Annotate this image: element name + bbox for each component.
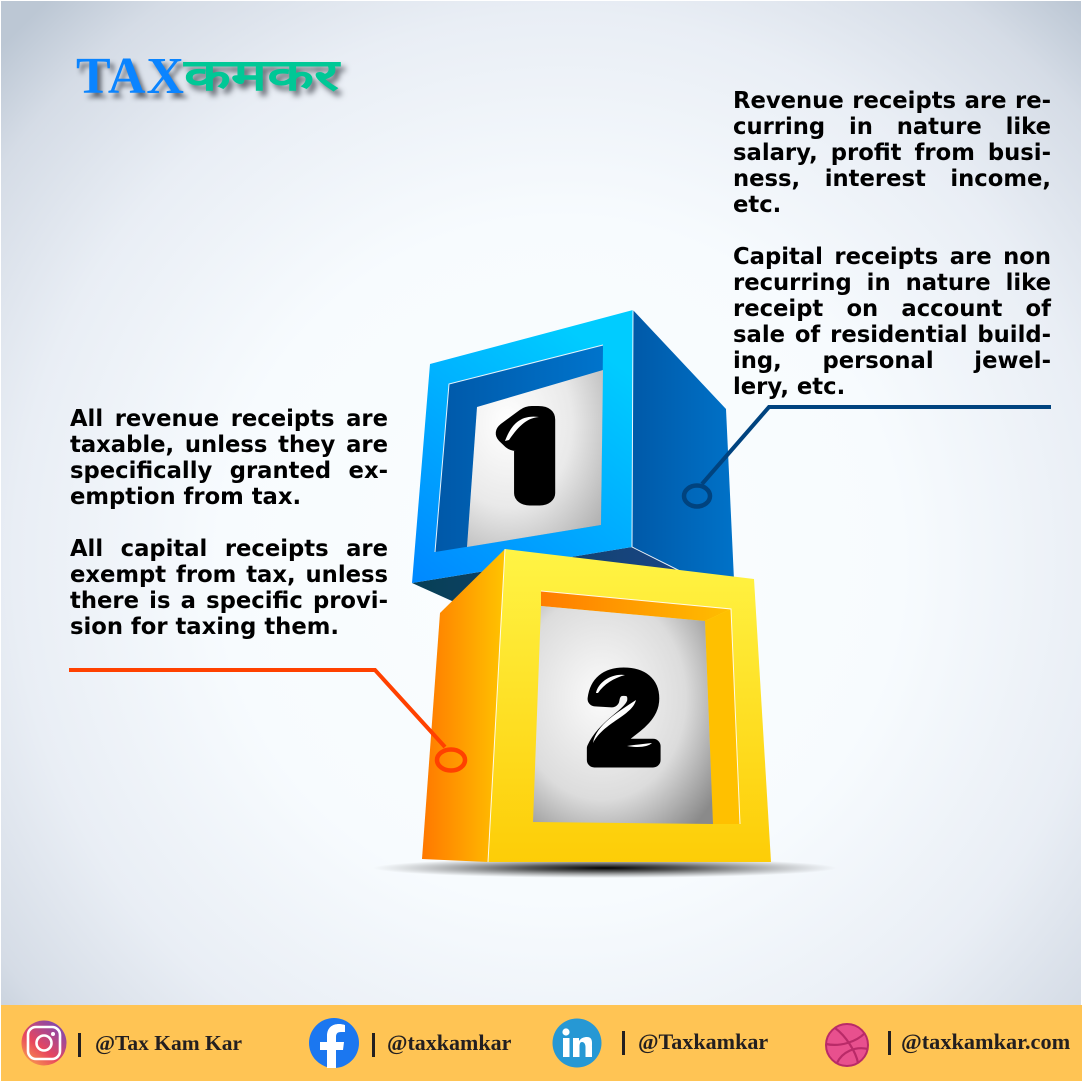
text block: taxability of receipts: All revenue receipts are — [70, 406, 388, 432]
text block: taxability of receipts: emption from tax. — [70, 484, 301, 510]
text block: revenue and capital receipts: ing, personal jewel- — [733, 348, 1051, 374]
number 1: 1 — [493, 409, 570, 510]
text block: revenue and capital receipts — [733, 88, 1052, 400]
cube 2 (yellow) — [422, 549, 771, 862]
text block: revenue and capital receipts: salary, profit from busi- — [733, 140, 1051, 166]
footer handle: facebook: @taxkamkar — [387, 1030, 511, 1055]
callout line: orange — [69, 670, 465, 770]
text block: revenue and capital receipts: curring in nature like — [733, 114, 1051, 140]
logo: TAX kamkar: कमकर — [184, 39, 339, 103]
text block: taxability of receipts: sion for taxing them. — [70, 614, 339, 640]
cube 1 (blue) — [412, 310, 734, 601]
logo: TAX kamkar: TAX — [76, 48, 185, 105]
text block: revenue and capital receipts: Capital receipts are non — [733, 244, 1051, 270]
footer handle: website: @taxkamkar.com — [901, 1029, 1070, 1054]
text block: revenue and capital receipts: Revenue receipts are re- — [733, 88, 1051, 114]
callout line: blue — [684, 407, 1051, 506]
text block: revenue and capital receipts: recurring in nature like — [733, 270, 1051, 296]
ground shadow — [373, 858, 837, 878]
footer icons — [22, 1018, 869, 1068]
footer bar — [1, 1005, 1082, 1081]
text block: taxability of receipts: All capital receipts are — [70, 536, 388, 562]
text block: revenue and capital receipts: receipt on account of — [733, 296, 1051, 322]
text block: revenue and capital receipts: sale of residential build- — [733, 322, 1051, 348]
footer handle: linkedin: @Taxkamkar — [638, 1029, 768, 1054]
icon: dribbble — [826, 1024, 868, 1066]
footer handle: instagram: @Tax Kam Kar — [95, 1031, 242, 1055]
icon: linkedin — [552, 1018, 602, 1068]
icon: facebook — [309, 1018, 359, 1068]
text block: taxability of receipts — [70, 406, 388, 640]
number 2: 2 — [590, 650, 658, 786]
text block: taxability of receipts: there is a specific provi- — [70, 588, 388, 614]
text block: revenue and capital receipts: ness, interest income, — [733, 166, 1051, 192]
text block: revenue and capital receipts: etc. — [733, 192, 781, 218]
icon: instagram — [22, 1020, 66, 1066]
text block: taxability of receipts: specifically granted ex- — [70, 458, 388, 484]
text block: taxability of receipts: exempt from tax, unless — [70, 562, 388, 588]
text block: taxability of receipts: taxable, unless they are — [70, 432, 388, 458]
logo: TAX kamkar — [76, 39, 349, 105]
text block: revenue and capital receipts: lery, etc. — [733, 374, 845, 400]
